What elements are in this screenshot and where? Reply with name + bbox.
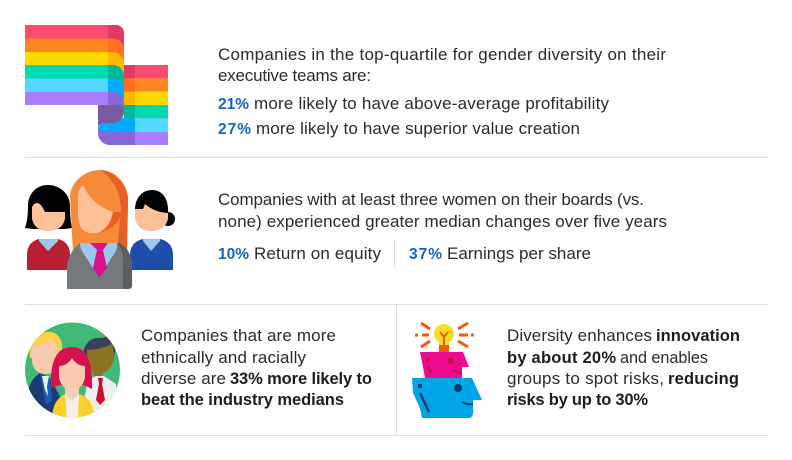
text: women on boards statement: none) experienced greater median changes over five years <box>218 212 667 231</box>
text: women on boards statement <box>218 190 667 231</box>
text: innovation statement: Diversity enhances <box>507 326 652 345</box>
text: top-quartile statement: executive teams are: <box>218 66 371 85</box>
text: ethnic diversity statement <box>141 326 372 409</box>
text: top-quartile statement: 21% <box>218 96 249 113</box>
icon: diverse team in green circle <box>25 322 120 420</box>
text: innovation statement: reducing <box>668 370 739 388</box>
text: innovation statement: risks by up to 30% <box>507 391 648 409</box>
text: ethnic diversity statement: diverse are <box>141 369 226 388</box>
text: top-quartile statement <box>218 45 666 138</box>
text: top-quartile statement: more likely to have above-average profitability <box>254 94 610 113</box>
text: women on boards statement: Companies with at least three women on their boards (vs. <box>218 190 644 209</box>
text: top-quartile statement: 27% <box>218 121 251 138</box>
text: ethnic diversity statement: ethnically and racially <box>141 348 306 367</box>
stat: earnings per share: Earnings per share <box>447 244 591 263</box>
text: innovation statement: and enables <box>620 349 708 367</box>
stat: earnings per share: 37% <box>409 246 442 263</box>
text: innovation statement: groups to spot risks, <box>507 369 664 388</box>
stat: return on equity: Return on equity <box>254 244 382 263</box>
text: top-quartile statement: more likely to have superior value creation <box>256 119 580 138</box>
icon: heads with light bulb <box>412 323 482 418</box>
text: ethnic diversity statement: beat the industry medians <box>141 391 344 409</box>
text: innovation statement: by about 20% <box>507 349 616 367</box>
text: top-quartile statement: Companies in the top-quartile for gender diversity on their <box>218 45 666 64</box>
icon: rainbow flag <box>25 25 168 145</box>
stat: return on equity: 10% <box>218 246 249 263</box>
icon: three people <box>25 170 175 289</box>
text: innovation statement <box>507 326 740 409</box>
text: ethnic diversity statement: 33% more likely to <box>230 370 372 388</box>
text: ethnic diversity statement: Companies that are more <box>141 326 336 345</box>
text: innovation statement: innovation <box>656 327 740 345</box>
